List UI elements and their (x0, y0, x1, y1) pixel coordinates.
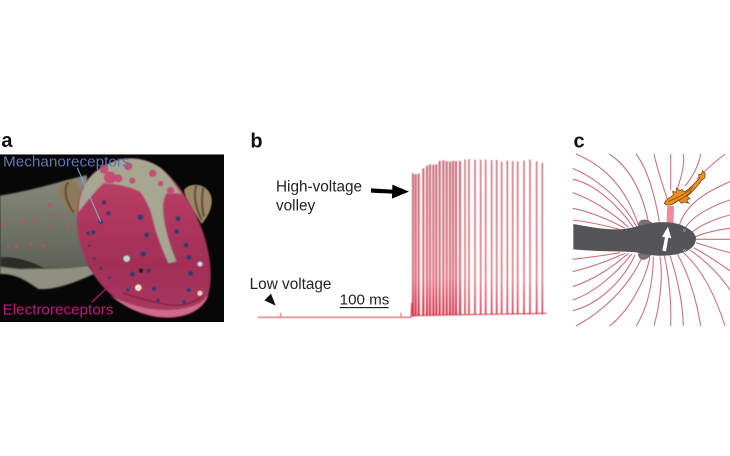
eel ribbon fin (0, 258, 95, 289)
label: Electroreceptors: Electroreceptors (3, 302, 113, 318)
eel body (0, 175, 100, 269)
panel letter a: a (1, 130, 13, 152)
scale bar: 100 ms: 100 ms (340, 292, 390, 309)
white arrow (662, 227, 671, 251)
label: High-voltage volley: High-voltage (276, 179, 362, 196)
panel letter c: c (574, 130, 585, 152)
field lines below eel (573, 243, 730, 326)
bright pit highlights (123, 255, 203, 296)
label: Low voltage: Low voltage (250, 276, 331, 293)
icon: low voltage arrowhead (264, 294, 276, 306)
pointer: electroreceptors (92, 275, 121, 302)
eel body silhouette (573, 222, 696, 256)
pink signal beam (666, 206, 674, 224)
panel c: electric field diagram (573, 154, 730, 326)
low voltage ticks (281, 313, 401, 317)
spike train (258, 159, 547, 317)
gray dorsal cap and stripe (79, 159, 182, 263)
eel eyes (683, 229, 685, 251)
pectoral fins (59, 180, 81, 217)
mouth line (123, 293, 203, 305)
photo of eel head (0, 154, 224, 322)
fins (638, 220, 652, 259)
sensory pits (87, 200, 193, 304)
panel a: electric eel head photo (0, 130, 224, 322)
panel letter b: b (250, 131, 263, 153)
arrow: high-voltage volley (371, 185, 409, 199)
body pink spots (2, 203, 70, 249)
fish prey (664, 171, 705, 205)
label: Mechanoreceptors: Mechanoreceptors (3, 155, 130, 171)
label: High-voltage volley: volley (276, 197, 316, 214)
volley spikes (413, 160, 460, 317)
pink head patches (100, 162, 174, 194)
field lines above eel (573, 154, 730, 239)
panel b: voltage trace (250, 131, 547, 317)
baseline (258, 303, 547, 317)
pointer: mechanoreceptors (77, 168, 101, 222)
pale lower lip rim (110, 295, 208, 317)
head silhouette crimson (77, 159, 211, 318)
